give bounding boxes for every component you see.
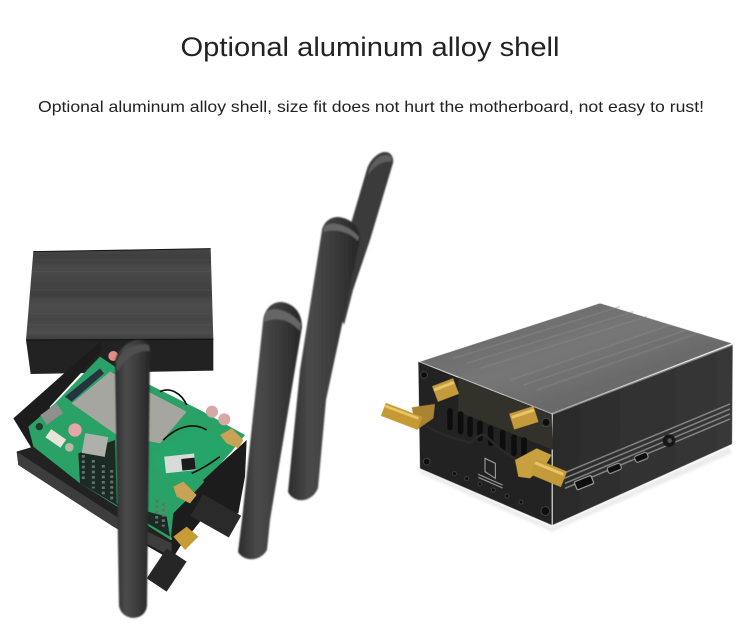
side grooves: [563, 404, 730, 488]
vent slots: [450, 411, 524, 456]
wireless module: [72, 372, 187, 443]
title: Optional aluminum alloy shell: [180, 32, 560, 62]
ports: [574, 475, 594, 490]
enclosure side face: [553, 345, 733, 525]
gold connectors: [220, 428, 243, 448]
sd card icon: [478, 458, 503, 488]
gold connector upper left: [434, 382, 456, 394]
photo: open unit with circuit board: [13, 342, 247, 585]
enclosure front face: [418, 362, 552, 525]
circuit board: [28, 357, 245, 540]
rear black connector block: [203, 457, 242, 507]
lower board with pins: [78, 440, 170, 537]
antenna cap highlight: [323, 224, 359, 241]
antenna: far back: [335, 152, 393, 325]
dark inner shell: [13, 342, 247, 560]
top cut-out on front: [458, 377, 553, 450]
subtitle text: Optional aluminum alloy shell, size fit does not hurt the motherboard, not easy to rust!: [38, 99, 704, 116]
side connector cluster: [40, 404, 63, 425]
screws and holes: [421, 372, 550, 515]
enclosure top face: [420, 303, 732, 413]
photo: front antenna: [115, 340, 150, 618]
photo: aluminum lid: [26, 249, 213, 374]
photo: closed aluminum enclosure: [383, 303, 733, 532]
gold connector upper right: [512, 410, 536, 422]
antenna: tall, rear: [288, 217, 360, 500]
enclosure soft shadow: [420, 447, 732, 532]
underside fill below board: [17, 447, 172, 557]
shell tray: [17, 452, 172, 557]
red caps: [206, 406, 218, 418]
rf cables and small board: [155, 423, 227, 483]
photo: middle antenna: [238, 302, 302, 559]
gold connector lower right: [515, 448, 564, 479]
photo: back antennas: [288, 152, 393, 500]
right-angle antenna hinge: [197, 505, 235, 527]
gold connector left angled: [383, 404, 435, 430]
thin rf cable: [420, 422, 520, 462]
